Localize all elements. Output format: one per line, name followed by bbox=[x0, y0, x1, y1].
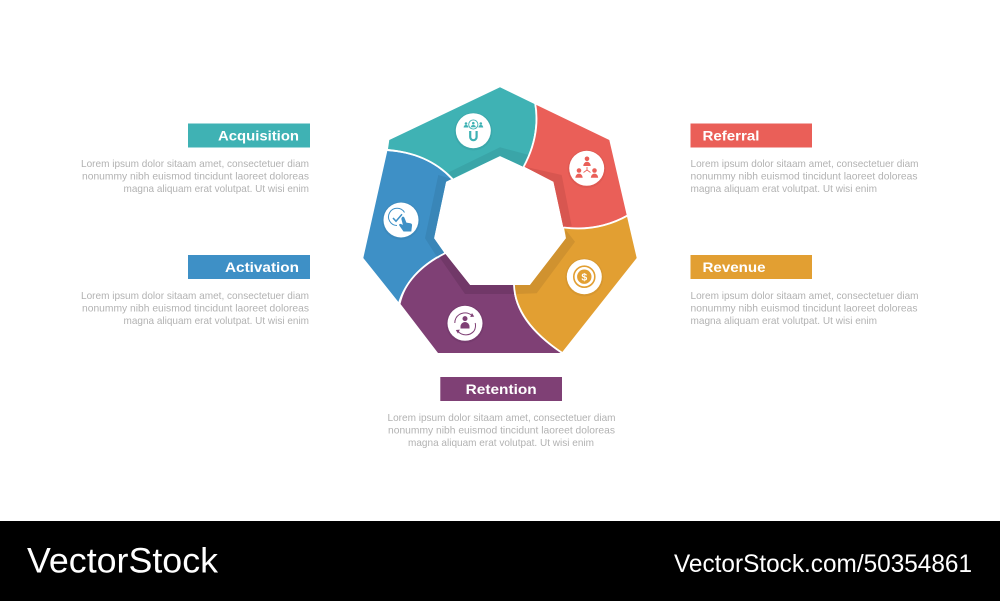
text block: activation bbox=[81, 290, 309, 327]
segment: referral bbox=[524, 104, 627, 228]
label block: acquisition bbox=[81, 124, 310, 195]
text block: retention bbox=[388, 412, 616, 449]
text block: activation: magna aliquam erat volutpat. Ut wisi enim bbox=[124, 315, 309, 327]
footer logo text: VectorStock bbox=[27, 542, 219, 580]
text block: activation: Lorem ipsum dolor sitaam amet, consectetuer diam bbox=[81, 290, 309, 302]
text block: retention: nonummy nibh euismod tincidunt laoreet doloreas bbox=[388, 424, 615, 436]
heading: revenue bbox=[690, 255, 812, 279]
text block: acquisition bbox=[81, 158, 309, 195]
heading: acquisition bbox=[188, 124, 310, 148]
heading: revenue: Revenue bbox=[702, 259, 766, 275]
label block: referral bbox=[690, 124, 919, 195]
icon: referral network bbox=[568, 150, 606, 188]
heading: activation bbox=[188, 255, 310, 279]
text block: activation: nonummy nibh euismod tincidunt laoreet doloreas bbox=[82, 302, 309, 314]
segment: revenue bbox=[514, 216, 637, 352]
icon: revenue coin bbox=[565, 258, 603, 296]
text block: revenue: nonummy nibh euismod tincidunt laoreet doloreas bbox=[690, 302, 918, 314]
segment: activation bbox=[363, 151, 452, 303]
text block: referral: nonummy nibh euismod tincidunt laoreet doloreas bbox=[690, 170, 918, 182]
heading: retention bbox=[440, 377, 562, 401]
label block: retention bbox=[388, 377, 616, 449]
heading: activation: Activation bbox=[225, 259, 299, 275]
segment separators bbox=[386, 102, 628, 354]
footer bar bbox=[0, 521, 1000, 601]
text block: revenue bbox=[690, 290, 919, 327]
heading: retention: Retention bbox=[466, 381, 537, 397]
text block: referral: Lorem ipsum dolor sitaam amet, consectetuer diam bbox=[690, 158, 919, 170]
heading: referral bbox=[690, 124, 812, 148]
text block: acquisition: Lorem ipsum dolor sitaam amet, consectetuer diam bbox=[81, 158, 309, 170]
text block: acquisition: nonummy nibh euismod tincidunt laoreet doloreas bbox=[82, 170, 309, 182]
text block: retention: Lorem ipsum dolor sitaam amet, consectetuer diam bbox=[388, 412, 616, 424]
text block: retention: magna aliquam erat volutpat. Ut wisi enim bbox=[408, 437, 594, 449]
text block: referral: magna aliquam erat volutpat. Ut wisi enim bbox=[690, 183, 877, 195]
text block: revenue: Lorem ipsum dolor sitaam amet, consectetuer diam bbox=[690, 290, 919, 302]
icon: acquisition magnet and people bbox=[454, 112, 492, 150]
footer image id: VectorStock.com/50354861 bbox=[674, 550, 972, 578]
heading: acquisition: Acquisition bbox=[218, 128, 299, 144]
text block: revenue: magna aliquam erat volutpat. Ut wisi enim bbox=[690, 315, 877, 327]
label block: activation bbox=[81, 255, 310, 327]
heading: referral: Referral bbox=[702, 128, 760, 144]
segment: retention bbox=[400, 254, 561, 353]
text block: referral bbox=[690, 158, 919, 195]
segment: acquisition bbox=[388, 87, 536, 179]
heptagon cycle diagram bbox=[363, 87, 637, 354]
icon: revenue coin: $ bbox=[581, 272, 587, 284]
label block: revenue bbox=[690, 255, 919, 327]
text block: acquisition: magna aliquam erat volutpat. Ut wisi enim bbox=[124, 183, 309, 195]
icon: retention person in arrows bbox=[446, 305, 484, 343]
icon: activation hand and check bbox=[382, 202, 420, 240]
